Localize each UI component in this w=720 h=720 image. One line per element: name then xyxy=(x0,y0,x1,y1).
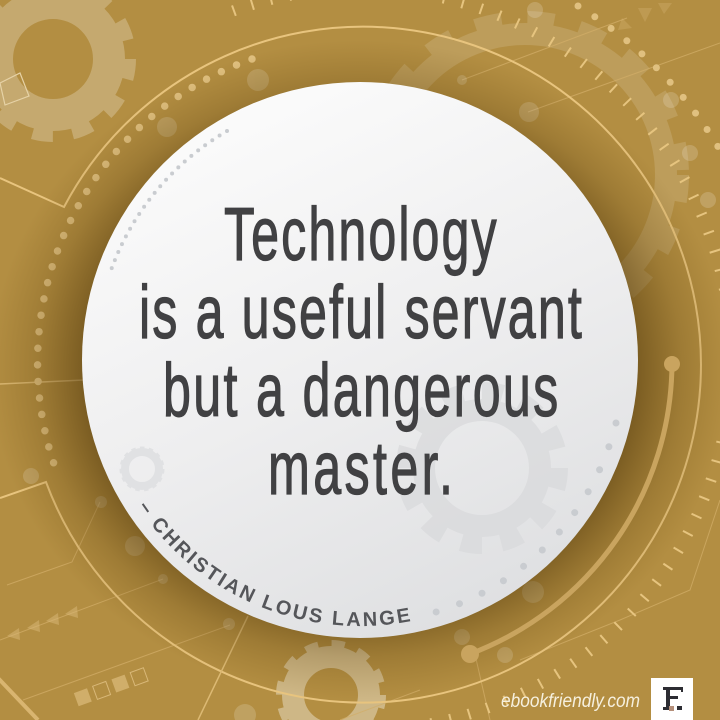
gear on disc: large xyxy=(405,391,559,545)
gear: top right xyxy=(368,18,682,332)
arrow markers bottom left xyxy=(7,606,78,640)
arrow markers top right xyxy=(618,3,672,30)
quote text: master. xyxy=(268,426,453,510)
logo xyxy=(651,678,693,720)
square markers xyxy=(74,668,148,706)
dotted arc on disc upper left xyxy=(110,131,227,273)
quote text: is a useful servant xyxy=(139,270,582,354)
dotted ring upper right xyxy=(578,6,720,150)
gear: bottom xyxy=(281,645,381,720)
square outline on gear xyxy=(0,73,29,105)
gear on disc: small xyxy=(121,448,163,490)
line crossing xyxy=(0,380,248,720)
website label: ebookfriendly.com xyxy=(501,691,640,712)
quote text xyxy=(139,192,582,510)
tick ring xyxy=(233,0,720,720)
dotted ring upper left xyxy=(38,59,252,478)
quote text: Technology xyxy=(224,192,497,276)
gear: top left xyxy=(0,0,128,134)
thick arc bottom left xyxy=(0,678,38,720)
thick arc with end nodes xyxy=(461,356,680,663)
white disc xyxy=(82,82,638,638)
dotted arc on disc lower right xyxy=(436,423,616,612)
author attribution: – CHRISTIAN LOUS LANGE xyxy=(142,503,410,626)
quote text: but a dangerous xyxy=(163,348,558,432)
